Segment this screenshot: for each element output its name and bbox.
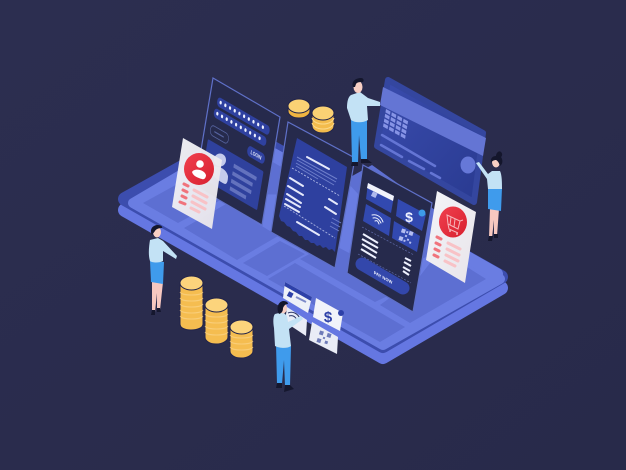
payment tile: card	[366, 183, 394, 213]
head	[279, 302, 287, 314]
receipt panel	[271, 122, 355, 268]
torso and arm	[273, 312, 303, 348]
coins top	[288, 99, 334, 133]
card chip	[383, 109, 408, 139]
head	[354, 81, 362, 93]
icon: wifi	[372, 215, 383, 224]
legs	[152, 281, 163, 312]
woman at card	[476, 151, 502, 241]
receipt paper	[279, 138, 347, 252]
form fields	[201, 95, 271, 210]
icon: QR code	[398, 228, 415, 244]
credit card	[377, 80, 486, 202]
legs	[351, 118, 367, 163]
platform tiles	[143, 146, 486, 342]
cart text rows	[434, 237, 460, 266]
blouse	[476, 162, 502, 189]
profile text rows	[180, 184, 207, 212]
legs	[276, 344, 291, 386]
payment tile: QR	[392, 221, 420, 252]
payment options panel	[347, 165, 432, 312]
legs	[489, 208, 499, 238]
man at bottom	[273, 301, 303, 392]
form fields: LOGIN	[250, 149, 262, 162]
pay now button	[362, 264, 403, 288]
skirt	[488, 188, 502, 211]
pay now button: PAY NOW	[374, 270, 393, 285]
coin stack tall	[180, 276, 203, 330]
card stripe	[380, 87, 486, 156]
payment tile: dollar	[396, 199, 426, 231]
head	[153, 226, 161, 238]
mini card: dollar: $	[324, 309, 333, 326]
head	[492, 156, 500, 168]
floating mini cards	[283, 282, 344, 354]
payment details lines	[361, 234, 411, 275]
mini card: bank	[283, 282, 312, 313]
coin stack small	[288, 99, 310, 118]
torso and arm	[347, 92, 380, 122]
payment tile: wifi	[363, 204, 391, 236]
man at card	[347, 78, 380, 166]
card logo circle	[460, 156, 476, 174]
coin stack medium	[312, 106, 334, 133]
blouse	[149, 238, 177, 262]
badge	[418, 210, 426, 216]
login panel	[195, 78, 280, 225]
profile card	[172, 138, 222, 229]
mini card: wifi	[285, 307, 307, 336]
phone platform	[125, 132, 501, 357]
card text lines	[381, 135, 440, 178]
coin stacks bottom	[180, 276, 253, 358]
icon: user badge	[184, 153, 214, 185]
icon: cart badge	[439, 206, 467, 238]
receipt lines	[285, 157, 337, 235]
woman at left	[149, 225, 177, 315]
skirt	[150, 261, 164, 284]
shopping cart card	[426, 191, 476, 283]
payment options panel: $	[405, 209, 413, 225]
mini card: QR	[309, 322, 338, 354]
coin stack short	[230, 320, 253, 358]
coin stack medium	[205, 298, 228, 344]
avatar silhouette	[210, 154, 228, 184]
